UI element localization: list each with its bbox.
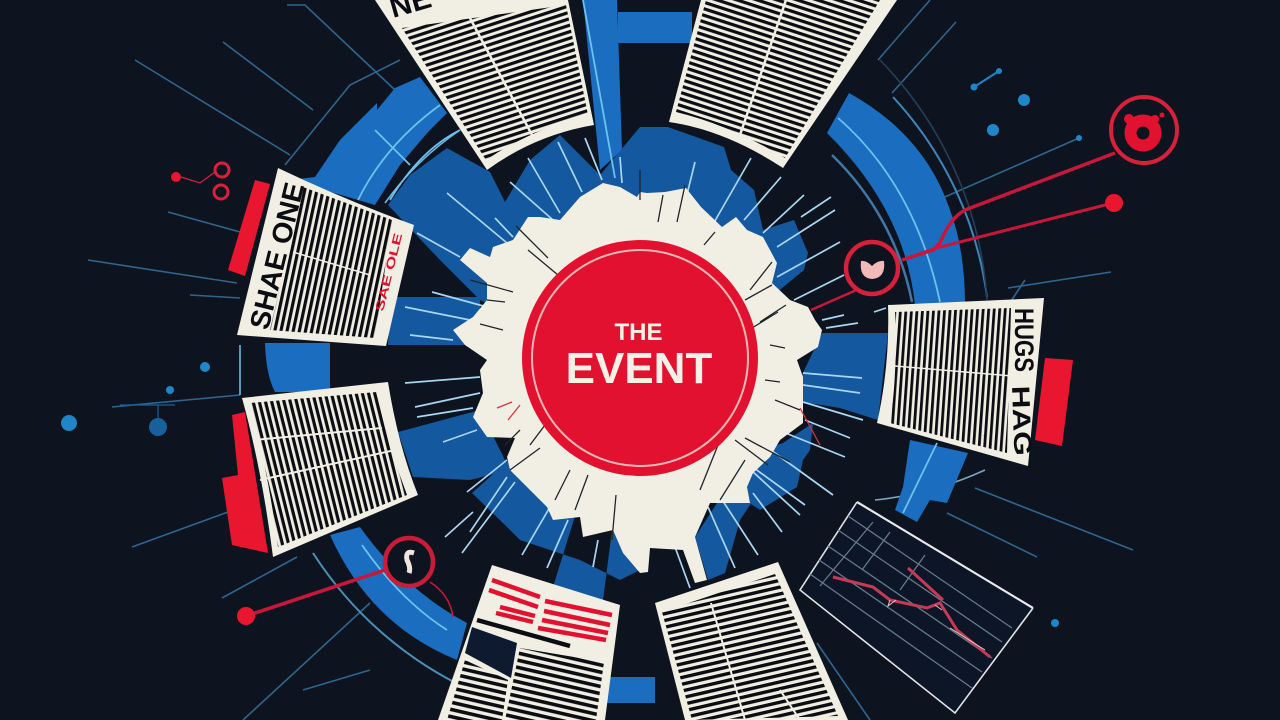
icon: heart badge <box>846 242 898 294</box>
blue inner burst <box>388 127 888 600</box>
newspaper: top left <box>375 0 594 170</box>
red bars behind papers <box>222 180 1073 553</box>
newspaper: left <box>237 168 414 346</box>
newspaper: left: SAE OLE <box>372 232 405 313</box>
headline bars <box>489 580 612 640</box>
social connector lines <box>246 153 1115 617</box>
icon: camera badge <box>1111 97 1177 163</box>
icon: red node dots <box>171 172 1123 625</box>
icon: top left red rings <box>181 163 229 199</box>
radial rays <box>405 138 886 588</box>
newspaper: bottom left <box>438 565 620 720</box>
newspaper: left: SHAE ONE <box>244 179 310 332</box>
title: the event <box>566 319 712 393</box>
light blue ring highlights <box>358 0 940 630</box>
line chart panel <box>800 502 1033 713</box>
central red circle <box>522 240 758 476</box>
newspaper: right <box>877 298 1044 466</box>
title: the event: THE <box>614 319 662 346</box>
newspaper: lower left <box>242 382 418 557</box>
newspaper: top right <box>669 0 897 168</box>
red trend line <box>833 568 990 657</box>
icon: s badge <box>385 538 433 586</box>
dark splash streaks <box>470 170 820 540</box>
newspaper: bottom middle <box>655 562 848 720</box>
newspaper: right: HUGS <box>1009 308 1039 372</box>
icon: blue dots <box>61 68 1082 627</box>
white splash burst <box>453 183 822 583</box>
title: the event: EVENT <box>566 344 712 393</box>
blue outer ring segments <box>265 0 968 703</box>
newspaper: right: HAG <box>1006 385 1036 456</box>
